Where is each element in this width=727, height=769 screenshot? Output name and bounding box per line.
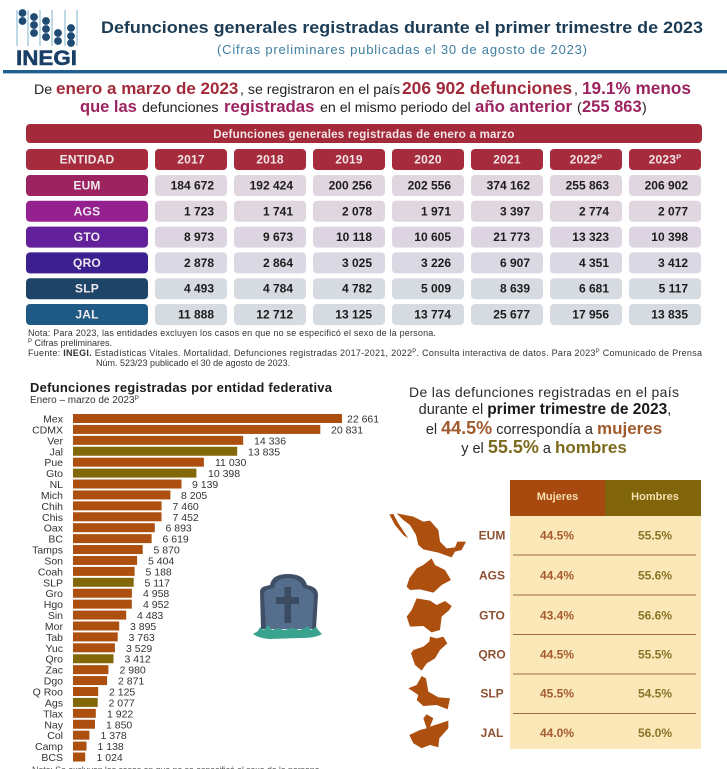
bar: BCS — [41, 752, 123, 764]
row: EUM share: 55.5% — [638, 528, 672, 542]
bar: Gto: 10 398 — [208, 468, 240, 480]
bar: Gro: Gro — [45, 588, 63, 600]
row: EUM: 192 424 — [250, 178, 293, 192]
row: SLP share — [480, 686, 672, 700]
bar: NL: 9 139 — [192, 479, 218, 491]
bar: Dgo: 2 871 — [118, 676, 144, 688]
map: Guanajuato — [407, 598, 452, 632]
column header: Mujeres: Mujeres — [537, 491, 578, 503]
bar: Oax — [44, 523, 192, 535]
row: AGS: 2 078 — [342, 204, 372, 218]
row: GTO share: 56.6% — [638, 608, 672, 622]
row: SLP share: SLP — [480, 686, 504, 700]
statement text: que las — [80, 98, 137, 116]
bar: Tlax: 1 922 — [107, 708, 133, 720]
bar: CDMX: 20 831 — [331, 424, 363, 436]
bar: Mex: Mex — [43, 414, 64, 426]
row: GTO: 8 973 — [184, 230, 214, 244]
bar: Chih: Chih — [41, 501, 63, 513]
bar: Q Roo: 2 125 — [109, 686, 135, 698]
row: EUM: 374 162 — [487, 178, 530, 192]
bar: Nay: Nay — [44, 719, 64, 731]
statement text: 206 902 defunciones — [402, 78, 572, 98]
bar: Zac: Zac — [45, 665, 63, 677]
statement text: ( — [577, 100, 582, 116]
bar: Coah: 5 188 — [146, 566, 172, 578]
bar: Hgo: Hgo — [44, 599, 63, 611]
statement text — [34, 78, 691, 116]
header row: 2020 — [414, 152, 442, 166]
statement text: en el mismo periodo del — [320, 100, 471, 116]
bar: Q Roo — [33, 686, 135, 698]
row: QRO: 2 878 — [184, 256, 214, 270]
bar: Col: 1 378 — [100, 730, 127, 742]
column header: Hombres — [605, 480, 701, 516]
row: SLP: 4 493 — [184, 282, 214, 296]
statement text: registradas — [224, 97, 314, 116]
row: JAL: 13 774 — [414, 308, 451, 322]
table: mujeres y hombres — [478, 480, 701, 749]
bar: Tab — [46, 632, 155, 644]
bar: Mich: Mich — [41, 490, 63, 502]
bar: Qro: Qro — [45, 654, 63, 666]
statement text: , — [574, 82, 578, 98]
text block: gender summary: y el 55.5% a hombres — [461, 437, 627, 457]
header row: ENTIDAD — [60, 152, 114, 166]
bar: Ver: Ver — [47, 435, 63, 447]
row: QRO: 4 351 — [579, 256, 609, 270]
bar: Camp: 1 138 — [98, 741, 124, 753]
bar: Tab: Tab — [46, 632, 63, 644]
map: Querétaro — [411, 637, 447, 671]
bar: Yuc — [45, 643, 152, 655]
row: QRO: QRO — [73, 256, 101, 270]
row: EUM — [26, 175, 701, 196]
bar: Chis: 7 452 — [172, 512, 199, 524]
statement text: defunciones — [142, 100, 219, 116]
row: QRO: 6 907 — [500, 256, 530, 270]
bar: Chis: Chis — [42, 512, 63, 524]
bar: Oax: 6 893 — [166, 523, 192, 535]
bar: BCS: 1 024 — [96, 752, 123, 764]
row: SLP: 4 784 — [263, 282, 293, 296]
map: Jalisco — [409, 714, 448, 748]
row: AGS: 3 397 — [500, 204, 530, 218]
bar: SLP — [43, 577, 170, 589]
bar: Ver: 14 336 — [254, 435, 286, 447]
column header: Mujeres — [510, 480, 605, 516]
bar: Hgo: 4 952 — [143, 599, 169, 611]
bar: Mor: 3 895 — [130, 621, 156, 633]
row: QRO: 3 412 — [658, 256, 688, 270]
statement text: ) — [642, 100, 647, 116]
row: QRO — [26, 252, 701, 273]
row: AGS: AGS — [74, 204, 100, 218]
row: AGS share — [479, 568, 672, 582]
row: QRO: 3 025 — [342, 256, 372, 270]
bar: Sin — [48, 610, 163, 622]
bar: Jal: 13 835 — [248, 446, 280, 458]
row: SLP: 5 117 — [659, 282, 688, 296]
notes and source: Cifras preliminares. — [32, 338, 112, 348]
bar: Coah — [38, 566, 172, 578]
notes and source: Nota: Para 2023, las entidades excluyen los casos en que no se especificó el sexo de la persona. — [28, 328, 436, 338]
row: JAL — [26, 304, 701, 325]
row: SLP: SLP — [75, 282, 99, 296]
bar: Mex: 22 661 — [347, 414, 379, 426]
text block: gender summary: el 44.5% correspondía a mujeres — [426, 418, 662, 438]
table title bar — [26, 124, 702, 143]
row: QRO: 2 864 — [263, 256, 293, 270]
bar: Qro — [45, 654, 151, 666]
logo: INEGI: INEGI — [16, 47, 77, 70]
notes and source: Núm. 523/23 publicado el 30 de agosto de 2023. — [96, 358, 290, 368]
row: SLP: 5 009 — [421, 282, 451, 296]
bar: Yuc: Yuc — [45, 643, 63, 655]
bar: Chih — [41, 501, 199, 513]
row: GTO share: 43.4% — [540, 608, 574, 622]
bar: Ver — [47, 435, 286, 447]
bar: Ags: Ags — [45, 697, 63, 709]
row: AGS: 2 077 — [658, 204, 688, 218]
notes and source: Comunicado de Prensa — [600, 348, 702, 358]
chart heading — [30, 380, 333, 406]
bar: Dgo — [44, 676, 144, 688]
chart heading: Defunciones registradas por entidad federativa — [30, 380, 333, 395]
bar chart: defunciones por entidad — [32, 414, 379, 764]
bar: BC: 6 619 — [162, 534, 189, 546]
bar: Camp — [35, 741, 124, 753]
bar: Qro: 3 412 — [124, 654, 151, 666]
bar: Tab: 3 763 — [128, 632, 155, 644]
bar: Tlax — [43, 708, 133, 720]
bar: Zac: 2 980 — [120, 665, 146, 677]
row: EUM: 206 902 — [645, 178, 688, 192]
table title bar: Defunciones generales registradas de enero a marzo — [213, 129, 515, 141]
row: EUM: EUM — [73, 178, 101, 192]
bar: Sin: Sin — [48, 610, 63, 622]
bar: Jal: Jal — [50, 446, 63, 458]
row: AGS: 1 741 — [263, 204, 293, 218]
bar: Son: 5 404 — [148, 555, 174, 567]
bar: Mor: Mor — [45, 621, 63, 633]
row: SLP: 8 639 — [500, 282, 530, 296]
row: QRO share: 55.5% — [638, 648, 672, 662]
bar: BCS: BCS — [41, 752, 63, 764]
bar: Tamps: 5 870 — [154, 545, 180, 557]
row: AGS: 1 971 — [421, 204, 451, 218]
bar: Jal — [50, 446, 280, 458]
bar: Ags: 2 077 — [108, 697, 135, 709]
bar: Ags — [45, 697, 135, 709]
bar: Gro: 4 958 — [143, 588, 169, 600]
row: SLP share: 45.5% — [540, 686, 574, 700]
bar: Son: Son — [44, 555, 63, 567]
statement text: año anterior — [475, 97, 572, 116]
row: AGS — [26, 201, 701, 222]
icon: tombstone — [253, 574, 322, 639]
row: AGS: 1 723 — [184, 204, 214, 218]
row: EUM: 184 672 — [171, 178, 214, 192]
statement text: De — [34, 82, 52, 98]
row: EUM share: 44.5% — [540, 528, 574, 542]
row: QRO: 3 226 — [421, 256, 451, 270]
row: AGS: 2 774 — [579, 204, 609, 218]
row: JAL share: 56.0% — [638, 726, 672, 740]
header row: 2022 — [570, 152, 597, 166]
table: defunciones 2017-2023 — [26, 124, 702, 325]
row: JAL: 12 712 — [256, 308, 293, 322]
text block: gender summary — [409, 384, 679, 457]
map: Aguascalientes — [407, 558, 451, 593]
statement text: enero a marzo de 2023 — [56, 79, 238, 98]
header row — [26, 149, 701, 170]
column header: Hombres: Hombres — [631, 491, 679, 503]
bar: NL — [50, 479, 218, 491]
row: SLP share: 54.5% — [638, 686, 672, 700]
row: AGS share: 44.4% — [540, 568, 574, 582]
bar: Chis — [42, 512, 199, 524]
bar: Mex — [43, 414, 379, 426]
row: SLP: 4 782 — [342, 282, 372, 296]
row: GTO — [26, 227, 701, 248]
row: QRO share — [478, 648, 672, 662]
bar: Mich: 8 205 — [181, 490, 207, 502]
row: GTO share: GTO — [479, 608, 505, 622]
row: AGS share: 55.6% — [638, 568, 672, 582]
bar: Pue: 11 030 — [215, 457, 246, 469]
row: GTO share — [479, 608, 672, 622]
row: GTO: 9 673 — [263, 230, 293, 244]
bar: Sin: 4 483 — [137, 610, 163, 622]
bar: BC — [48, 534, 189, 546]
row: GTO: 10 398 — [651, 230, 688, 244]
notes and source: P — [28, 339, 32, 345]
header row: P — [676, 152, 681, 162]
row: JAL share: JAL — [481, 726, 503, 740]
title: Defunciones generales registradas durante el primer trimestre de 2023 — [101, 19, 703, 37]
text block: gender summary: durante el primer trimestre de 2023, — [419, 401, 671, 418]
row: GTO: 21 773 — [493, 230, 530, 244]
chart heading: Enero – marzo de 2023 — [30, 395, 135, 406]
row: QRO share: 44.5% — [540, 648, 574, 662]
map: San Luis Potosí — [408, 676, 450, 709]
bar: Col — [47, 730, 127, 742]
bar: Yuc: 3 529 — [126, 643, 152, 655]
row: EUM: 200 256 — [329, 178, 372, 192]
row: EUM share: EUM — [479, 528, 505, 542]
notes and source: P — [596, 349, 600, 355]
statement text: 19.1% menos — [582, 78, 691, 98]
map: Mexico — [389, 513, 466, 557]
bar: Col: Col — [47, 730, 63, 742]
bar: Oax: Oax — [44, 523, 64, 535]
bar: CDMX: CDMX — [32, 424, 63, 436]
bar: SLP: SLP — [43, 577, 63, 589]
row: JAL: 17 956 — [572, 308, 609, 322]
bar: Tlax: Tlax — [43, 708, 64, 720]
bar: SLP: 5 117 — [144, 577, 170, 589]
header row: 2017 — [177, 152, 205, 166]
bar: Pue: Pue — [44, 457, 63, 469]
subtitle: (Cifras preliminares publicadas el 30 de agosto de 2023) — [217, 42, 587, 57]
notes and source — [28, 328, 702, 368]
bar: Gro — [45, 588, 169, 600]
header row: 2019 — [335, 152, 363, 166]
bar: Mich — [41, 490, 207, 502]
chart heading: P — [135, 395, 139, 402]
header row: 2023 — [649, 152, 676, 166]
bar: Q Roo: Q Roo — [33, 686, 63, 698]
bar: Mor — [45, 621, 156, 633]
row: GTO: 10 118 — [336, 230, 372, 244]
header row: P — [597, 152, 602, 162]
bar: Nay — [44, 719, 132, 731]
row: JAL: 13 125 — [335, 308, 372, 322]
bar: BC: BC — [48, 534, 63, 546]
bar: Gto — [46, 468, 240, 480]
header rule — [3, 70, 727, 74]
row: JAL: 13 835 — [651, 308, 688, 322]
row: EUM: 202 556 — [408, 178, 451, 192]
logo: INEGI — [16, 9, 77, 70]
bar: Hgo — [44, 599, 169, 611]
row: JAL share — [481, 726, 672, 740]
bar: Camp: Camp — [35, 741, 63, 753]
bar: Pue — [44, 457, 246, 469]
row: GTO: GTO — [74, 230, 100, 244]
bar: Zac — [45, 665, 146, 677]
row: EUM: 255 863 — [566, 178, 609, 192]
row: JAL: JAL — [75, 308, 99, 322]
bar: Tamps — [32, 545, 180, 557]
row: JAL: 25 677 — [493, 308, 530, 322]
notes and source: P — [412, 349, 416, 355]
row: SLP: 6 681 — [579, 282, 609, 296]
bar: Dgo: Dgo — [44, 676, 63, 688]
bar: Tamps: Tamps — [32, 545, 63, 557]
bar: Nay: 1 850 — [106, 719, 132, 731]
row: EUM share — [479, 528, 672, 542]
row: GTO: 13 323 — [572, 230, 609, 244]
header row: 2018 — [256, 152, 284, 166]
header row: 2021 — [493, 152, 521, 166]
state maps — [389, 513, 466, 748]
row: SLP — [26, 278, 701, 299]
row: AGS share: AGS — [479, 568, 505, 582]
row: QRO share: QRO — [478, 648, 506, 662]
statement text: 255 863 — [582, 98, 642, 116]
bar: Chih: 7 460 — [172, 501, 199, 513]
bar: CDMX — [32, 424, 363, 436]
statement text: , se registraron en el país — [240, 82, 400, 98]
row: GTO: 10 605 — [414, 230, 451, 244]
bar: Coah: Coah — [38, 566, 63, 578]
bar: Gto: Gto — [46, 468, 63, 480]
text block: gender summary: De las defunciones registradas en el país — [409, 384, 679, 400]
notes and source: . Consulta interactiva de datos. Para 2023 — [417, 348, 595, 358]
row: JAL: 11 888 — [178, 308, 214, 322]
bar: Son — [44, 555, 174, 567]
notes and source: Fuente: INEGI. Estadísticas Vitales. Mortalidad. Defunciones registradas 2017-2021, 2022 — [28, 348, 412, 358]
row: JAL share: 44.0% — [540, 726, 574, 740]
bar: NL: NL — [50, 479, 63, 491]
